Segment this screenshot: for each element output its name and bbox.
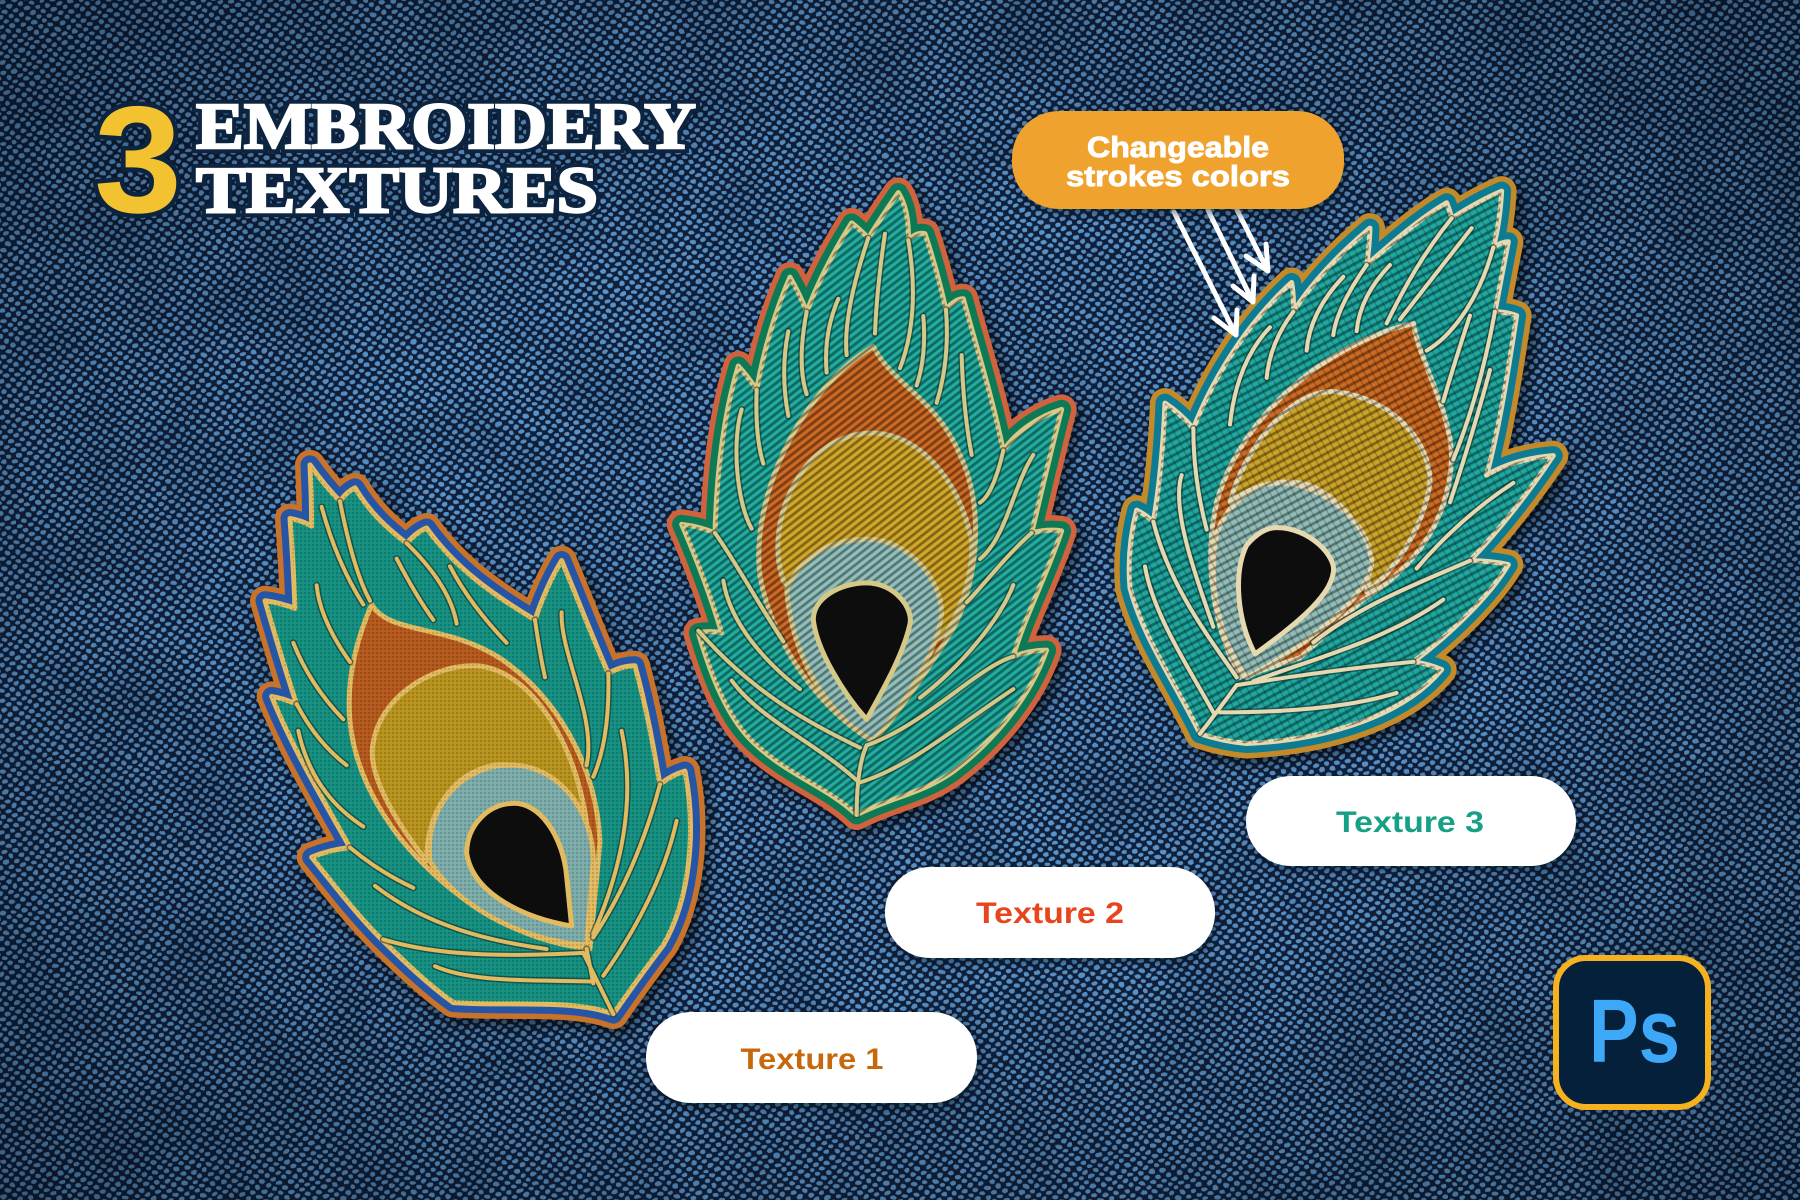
- label pill: texture 3: Texture 3: [1336, 806, 1484, 839]
- title line: EMBROIDERY: EMBROIDERY: [196, 90, 696, 163]
- title line: TEXTURES: TEXTURES: [196, 154, 598, 227]
- feather veins: [698, 234, 1033, 815]
- eye: yellow band: [778, 433, 972, 680]
- stitch texture overlay: [682, 193, 1062, 815]
- feather veins: [1145, 218, 1513, 734]
- label pill: texture 1: Texture 1: [740, 1043, 884, 1076]
- eye: black centre: [467, 803, 572, 926]
- label pill: texture 2: [885, 867, 1215, 958]
- title numeral 3: 3: [94, 75, 182, 245]
- eye: yellow band: [1230, 391, 1430, 592]
- eye: yellow band: [372, 666, 587, 861]
- eye: pale blue band: [787, 539, 942, 741]
- feather patch: texture 2: [682, 193, 1062, 815]
- eye: black centre: [813, 583, 910, 719]
- icon: Photoshop badge: [1556, 958, 1708, 1107]
- title line: TEXTURES: TEXTURES: [196, 154, 598, 227]
- feather veins: [293, 501, 677, 1014]
- eye: pale blue band: [1213, 483, 1372, 677]
- callout text: [1066, 132, 1290, 193]
- callout text: strokes colors: [1066, 161, 1290, 193]
- eye: orange band: [759, 346, 976, 741]
- title: [94, 75, 696, 245]
- eye: orange band: [1211, 323, 1452, 677]
- outer border: orange and blue: [265, 465, 690, 1014]
- eye: orange band: [349, 605, 600, 949]
- arrows from callout to feather stroke: [1174, 210, 1268, 335]
- callout: changeable strokes colors: [1012, 111, 1344, 209]
- feather patch: texture 3: [1129, 191, 1553, 744]
- outer border: amber and teal: [1129, 191, 1553, 744]
- eye: pale blue band: [429, 765, 593, 945]
- label pill: texture 3: [1246, 776, 1576, 866]
- eye: black centre: [1239, 528, 1334, 654]
- feather patch: texture 1: [265, 465, 690, 1014]
- callout text: Changeable: [1087, 132, 1269, 164]
- label pill: texture 2: Texture 2: [976, 897, 1124, 930]
- title line: EMBROIDERY: EMBROIDERY: [196, 90, 696, 163]
- stitch texture overlay: [1129, 191, 1553, 744]
- icon: Photoshop badge: Ps: [1589, 982, 1680, 1082]
- label pill: texture 1: [646, 1012, 977, 1103]
- outer border: coral and green: [682, 193, 1062, 815]
- stitch texture overlay: [265, 465, 690, 1014]
